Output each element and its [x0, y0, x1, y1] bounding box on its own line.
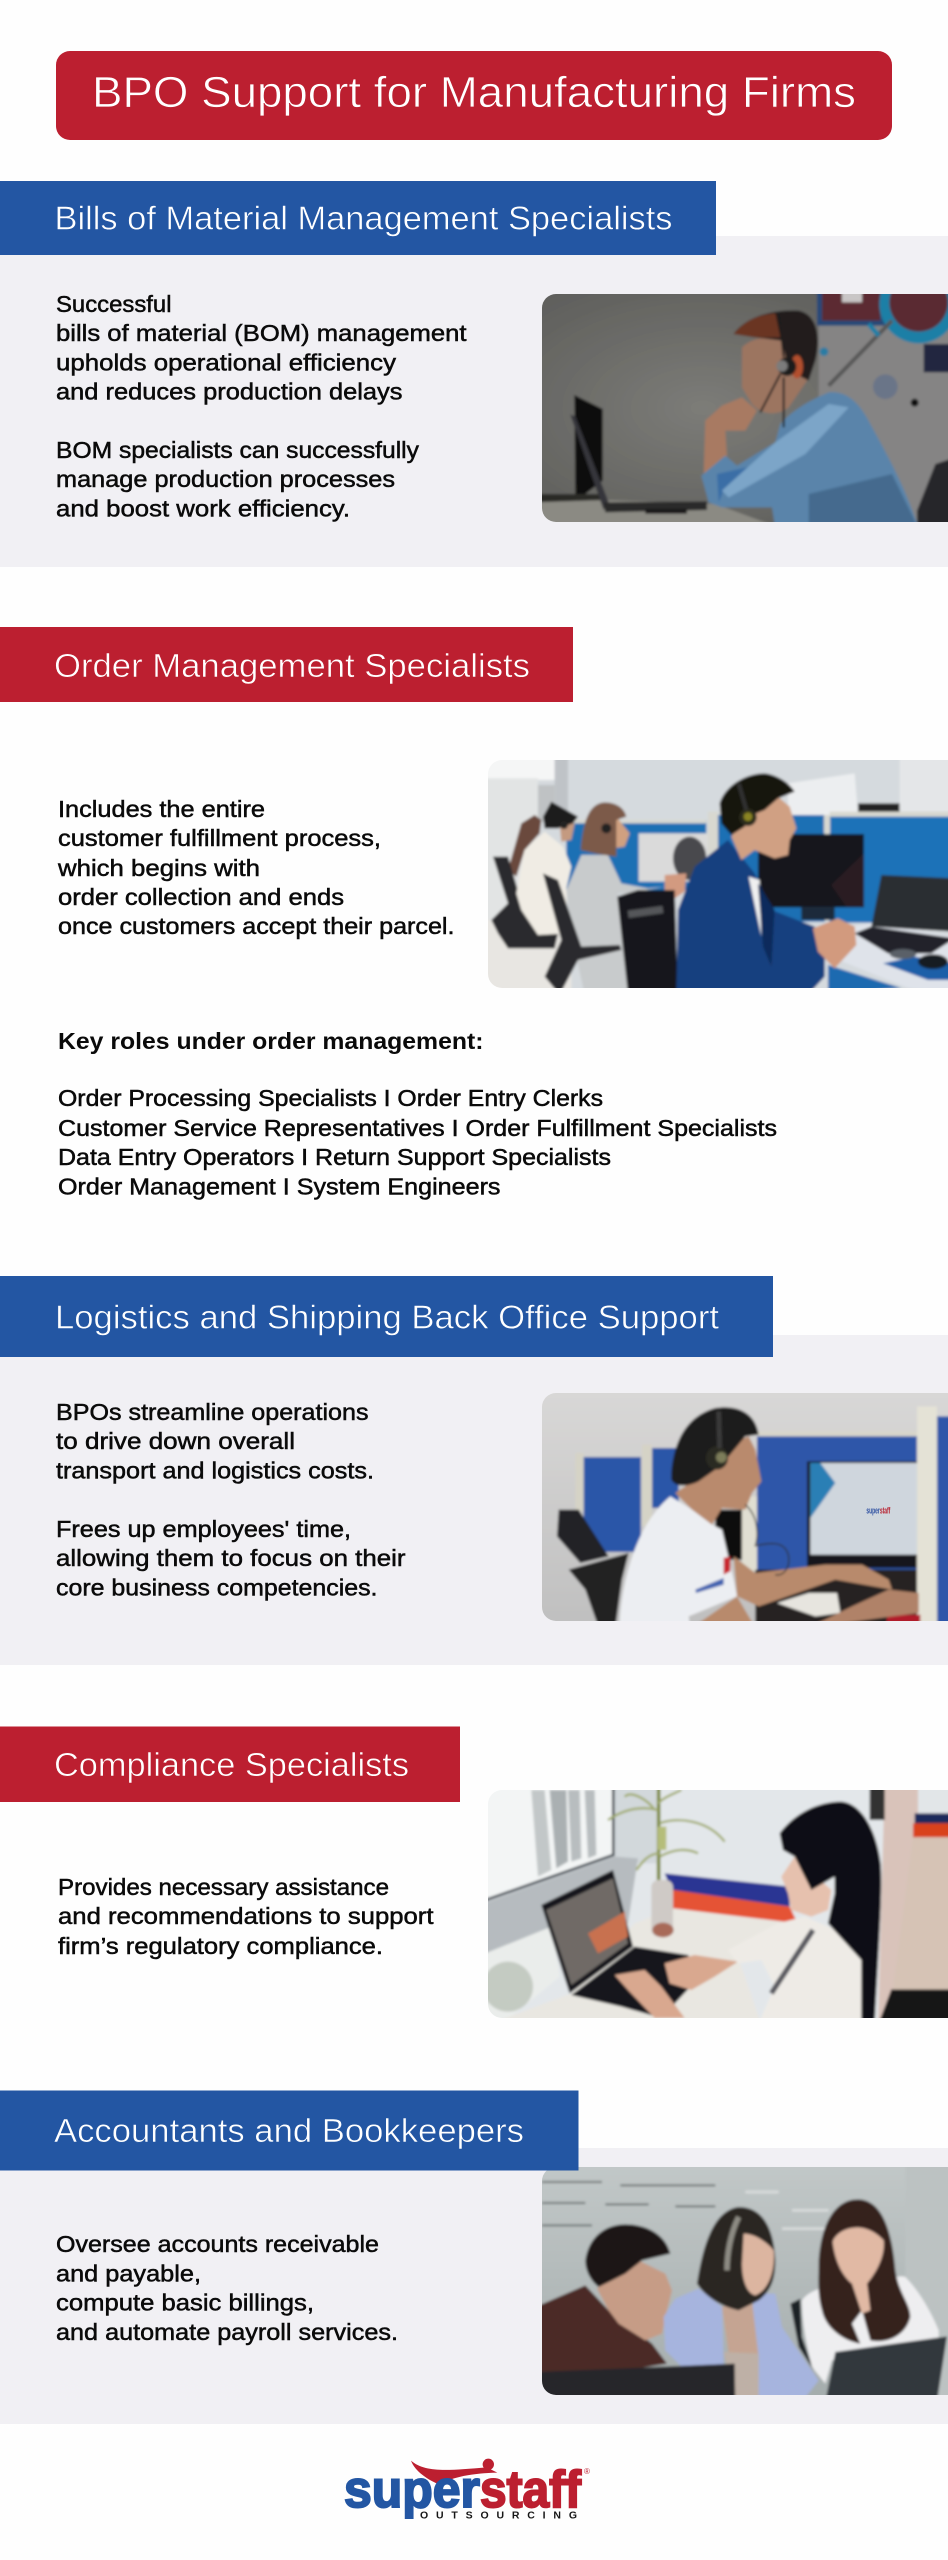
photo: woman typing on laptop	[488, 1790, 948, 2018]
text block: accountants description: Oversee accounts receivable	[56, 2231, 379, 2257]
title	[56, 51, 892, 140]
section header: Accountants and Bookkeepers: Accountants and Bookkeepers	[54, 2112, 524, 2149]
section header: Compliance Specialists	[0, 1726, 460, 1802]
photo: man with headset at laptop	[542, 294, 948, 522]
text block: accountants description	[56, 2231, 398, 2345]
section header: Logistics and Shipping Back Office Support	[0, 1276, 773, 1357]
photo: man in white shirt at computer	[542, 1393, 948, 1621]
text block: order management description: Includes the entire	[58, 796, 265, 822]
text block: accountants description: and payable,	[56, 2260, 201, 2286]
panel: accountants and bookkeepers	[0, 2090, 948, 2424]
section header: Bills of Material Management Specialists	[0, 181, 716, 255]
photo: call center team with headsets	[488, 760, 948, 988]
text block: logistics description: to drive down overall	[56, 1428, 295, 1454]
text block: logistics description: allowing them to focus on their	[56, 1545, 406, 1571]
text block: BOM description: BOM specialists can successfully	[56, 437, 420, 463]
logo: SuperStaff Outsourcing	[344, 2459, 590, 2522]
text block: BOM description: and boost work efficiency.	[56, 496, 350, 522]
text block: key roles heading: Key roles under order management:	[58, 1028, 483, 1054]
monitor logo text: superstaff	[866, 1506, 891, 1516]
logo: SuperStaff Outsourcing: OUTSOURCING	[420, 2510, 577, 2522]
panel: bills of material management specialists	[0, 181, 948, 567]
logo: SuperStaff Outsourcing: ®	[584, 2467, 590, 2476]
text block: logistics description: BPOs streamline operations	[56, 1399, 368, 1425]
text block: BOM description: manage production processes	[56, 466, 395, 492]
list: key roles: Order Processing Specialists I Order Entry Clerks	[58, 1085, 603, 1111]
logo: SuperStaff Outsourcing: staff	[480, 2461, 582, 2519]
text block: BOM description	[56, 291, 467, 522]
text block: logistics description: core business competencies.	[56, 1574, 378, 1600]
section header: Bills of Material Management Specialists: Bills of Material Management Specialists	[54, 200, 673, 236]
list: key roles: Customer Service Representatives I Order Fulfillment Specialists	[58, 1115, 777, 1141]
panel: compliance specialists	[0, 1726, 948, 2025]
section header: Logistics and Shipping Back Office Support: Logistics and Shipping Back Office Support	[55, 1298, 719, 1336]
text block: compliance description	[58, 1874, 434, 1959]
text block: compliance description: and recommendations to support	[58, 1903, 434, 1929]
text block: BOM description: Successful	[56, 291, 172, 317]
section header: Order Management Specialists	[0, 627, 573, 702]
section header: Order Management Specialists: Order Management Specialists	[54, 647, 530, 684]
title: BPO Support for Manufacturing Firms	[92, 68, 856, 117]
text block: BOM description: and reduces production delays	[56, 378, 402, 404]
section header: Compliance Specialists: Compliance Specialists	[54, 1746, 409, 1783]
text block: BOM description: upholds operational efficiency	[56, 350, 397, 376]
text block: compliance description: Provides necessary assistance	[58, 1874, 389, 1900]
text block: order management description: which begins with	[57, 855, 260, 881]
list: key roles: Data Entry Operators I Return Support Specialists	[58, 1144, 611, 1170]
list: key roles	[58, 1085, 777, 1200]
list: key roles: Order Management I System Engineers	[58, 1174, 500, 1200]
panel: logistics and shipping back office support	[0, 1276, 948, 1665]
photo: three colleagues at laptops	[542, 2167, 948, 2395]
panel: order management specialists	[0, 627, 948, 1200]
logo: SuperStaff Outsourcing: super	[344, 2461, 480, 2519]
text block: order management description: order collection and ends	[58, 884, 344, 910]
text block: order management description: customer fulfillment process,	[58, 825, 381, 851]
text block: BOM description: bills of material (BOM) management	[56, 320, 467, 346]
text block: accountants description: and automate payroll services.	[56, 2319, 398, 2345]
logo swoosh	[411, 2459, 497, 2485]
text block: accountants description: compute basic billings,	[56, 2290, 314, 2316]
text block: order management description: once customers accept their parcel.	[58, 913, 454, 939]
text block: logistics description: transport and logistics costs.	[56, 1458, 374, 1484]
text block: order management description	[57, 796, 455, 939]
text block: logistics description	[56, 1399, 406, 1600]
section header: Accountants and Bookkeepers	[0, 2090, 578, 2170]
text block: logistics description: Frees up employees' time,	[56, 1516, 351, 1542]
text block: compliance description: firm’s regulatory compliance.	[58, 1933, 383, 1959]
